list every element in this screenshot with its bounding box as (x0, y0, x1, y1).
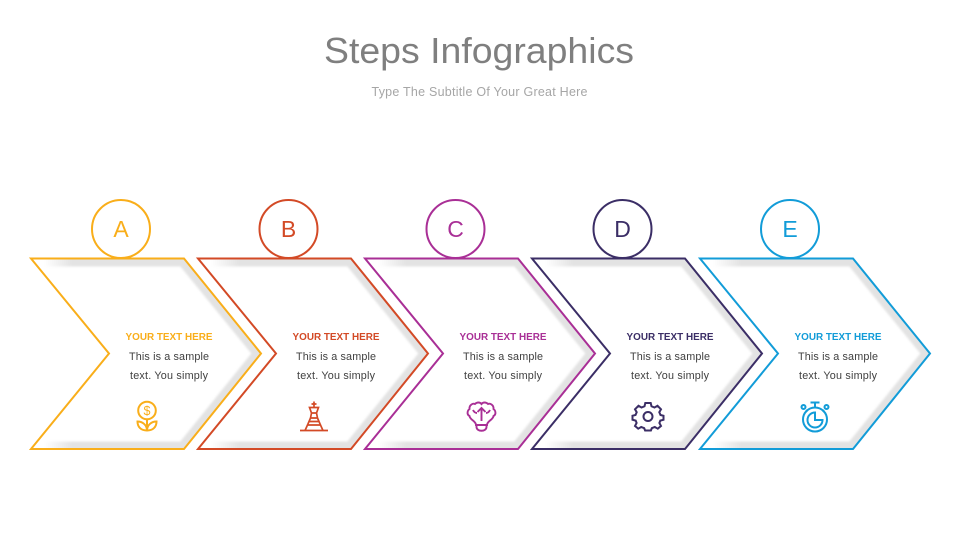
heading B: YOUR TEXT HERE (292, 331, 380, 343)
body text C: text. You simply (464, 370, 543, 382)
body text E: This is a sample (798, 351, 878, 363)
step D (532, 200, 762, 449)
body text C: This is a sample (463, 351, 543, 363)
step A (31, 200, 261, 449)
chevron C (365, 258, 595, 449)
circle D (594, 200, 652, 258)
heading A: YOUR TEXT HERE (126, 331, 212, 343)
shadow A (44, 259, 261, 449)
circle C (426, 200, 484, 258)
letter D: D (614, 216, 631, 242)
shadow C (378, 259, 595, 449)
body text B: text. You simply (297, 370, 376, 382)
body text A: text. You simply (130, 370, 209, 382)
body text E: text. You simply (799, 370, 878, 382)
body text E (798, 351, 878, 382)
body text C (463, 351, 543, 382)
body text B (296, 351, 376, 382)
chevron E (700, 258, 930, 449)
heading E: YOUR TEXT HERE (794, 331, 882, 343)
subtitle: Type The Subtitle Of Your Great Here (372, 85, 588, 99)
body text D: This is a sample (630, 351, 710, 363)
body text D: text. You simply (631, 370, 710, 382)
shadow B (211, 259, 428, 449)
step E (700, 200, 930, 449)
icon: chess king (300, 402, 328, 430)
shadow E (713, 259, 930, 449)
chevron D (532, 258, 762, 449)
letter B: B (281, 216, 296, 242)
icon: gear (632, 403, 664, 430)
icon: money flower (138, 402, 156, 430)
heading D: YOUR TEXT HERE (626, 331, 714, 343)
chevron B (198, 258, 428, 449)
step B (198, 200, 428, 449)
body text A (129, 351, 209, 382)
body text B: This is a sample (296, 351, 376, 363)
letter E: E (782, 216, 798, 242)
icon: brain bulb (468, 402, 495, 431)
title: Steps Infographics (324, 30, 634, 71)
chevron A (31, 258, 261, 449)
step C (365, 200, 595, 449)
icon: money flower: $ (144, 404, 151, 418)
body text A: This is a sample (129, 351, 209, 363)
circle A (92, 200, 150, 258)
body text D (630, 351, 710, 382)
letter C: C (447, 216, 464, 242)
icon: stopwatch (802, 402, 828, 432)
letter A: A (113, 216, 129, 242)
heading C: YOUR TEXT HERE (460, 331, 546, 343)
circle B (260, 200, 318, 258)
circle E (761, 200, 819, 258)
shadow D (545, 259, 762, 449)
